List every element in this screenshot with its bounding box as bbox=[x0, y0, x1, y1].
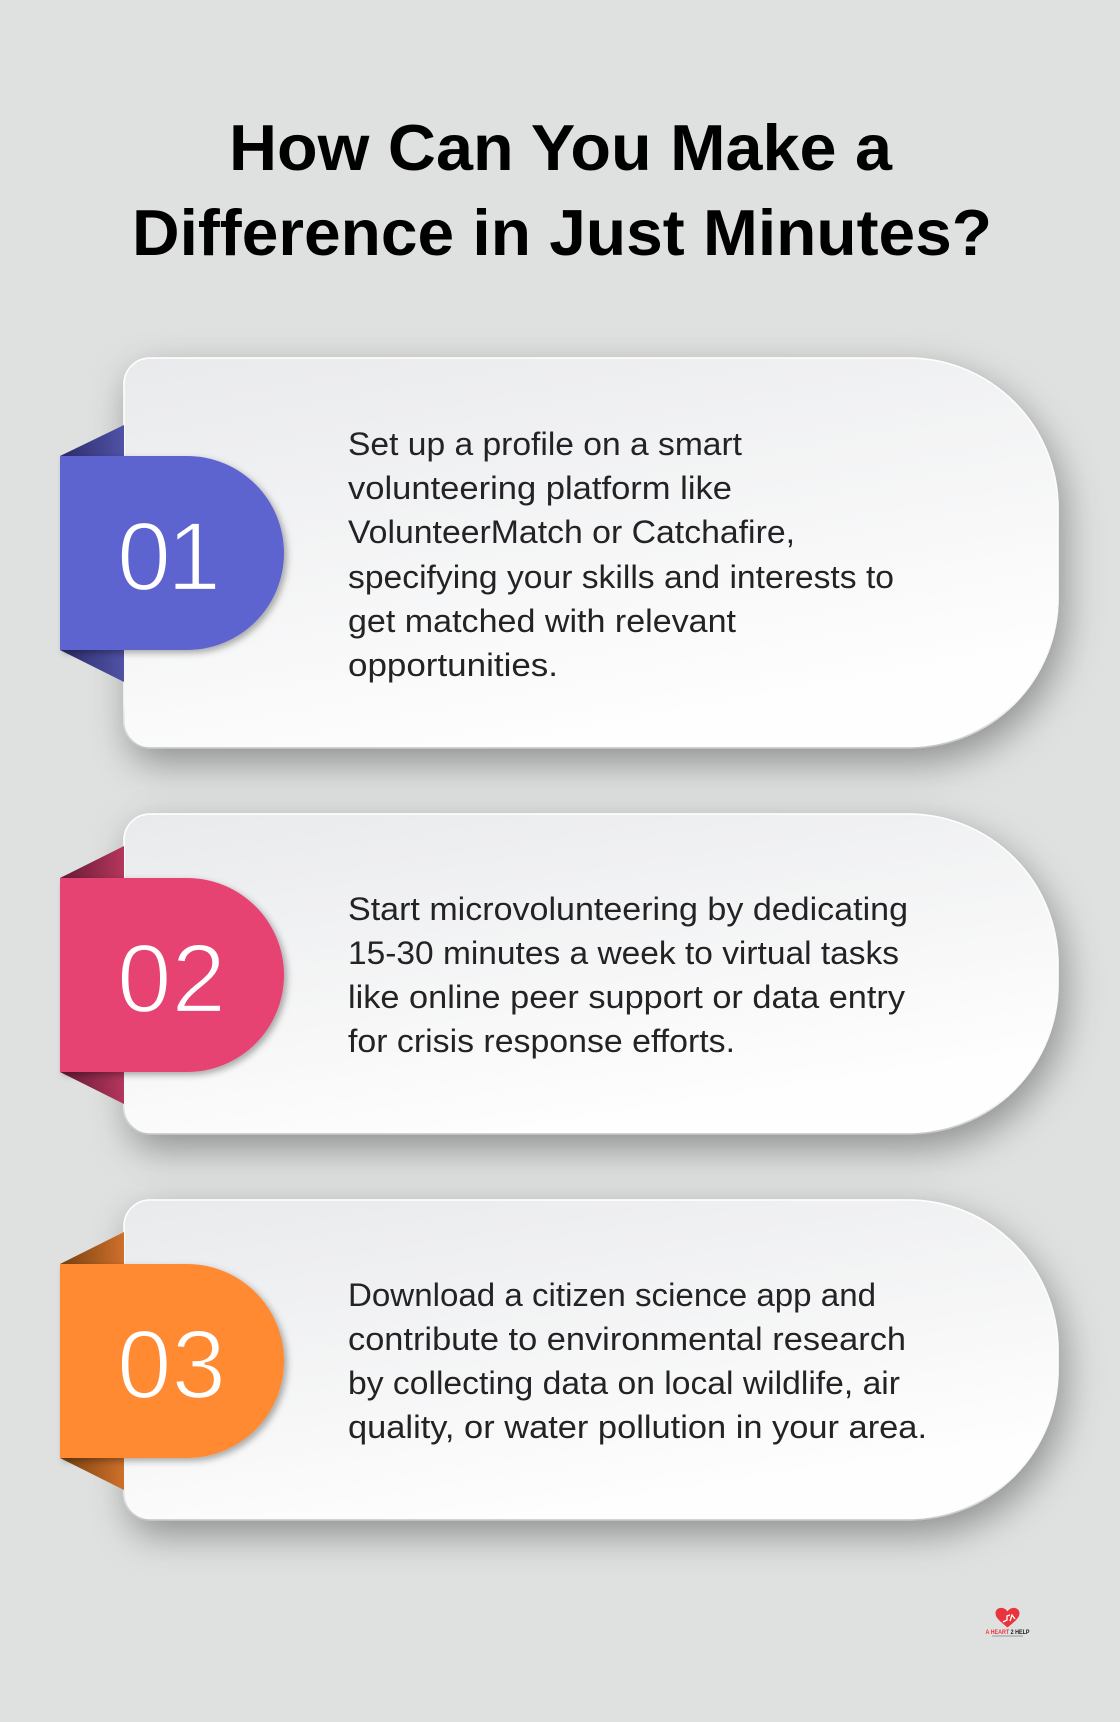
text: step 1: get matched with relevant bbox=[348, 603, 736, 639]
ribbon fold bottom 1 bbox=[60, 650, 124, 682]
text: step 1: opportunities. bbox=[348, 647, 558, 683]
ribbon fold bottom 2 bbox=[60, 1072, 124, 1104]
icon: hand bbox=[1003, 1615, 1015, 1622]
text: step 3: quality, or water pollution in your area. bbox=[348, 1409, 927, 1445]
logo wordmark: A HEART 2 HELP bbox=[986, 1630, 1030, 1636]
text: step 2 bbox=[348, 891, 908, 1059]
text: step 2: 15-30 minutes a week to virtual tasks bbox=[348, 935, 899, 971]
icon: heart bbox=[996, 1608, 1020, 1628]
ribbon fold bottom 3 bbox=[60, 1458, 124, 1490]
text: step 3: contribute to environmental research bbox=[348, 1321, 906, 1357]
text: step 1 bbox=[348, 426, 894, 683]
text: step 3: Download a citizen science app and bbox=[348, 1277, 876, 1313]
text: step 2: for crisis response efforts. bbox=[348, 1023, 735, 1059]
text: step 1: volunteering platform like bbox=[348, 470, 732, 506]
text: step 3 bbox=[348, 1277, 927, 1445]
card 3 background bbox=[124, 1200, 1058, 1520]
text: step 1: Set up a profile on a smart bbox=[348, 426, 742, 462]
ribbon fold top 3 bbox=[60, 1232, 124, 1264]
text: step 1: specifying your skills and interests to bbox=[348, 559, 894, 595]
title: Difference in Just Minutes? bbox=[132, 196, 992, 269]
number 02: 02 bbox=[117, 924, 226, 1033]
logo tagline bbox=[992, 1636, 1023, 1637]
text: step 1: VolunteerMatch or Catchafire, bbox=[348, 514, 795, 550]
panel: step 2 bbox=[60, 814, 1058, 1134]
number badge 2 bbox=[60, 878, 284, 1072]
card 1 background bbox=[124, 358, 1058, 748]
panel: step 1 bbox=[60, 358, 1058, 748]
ribbon fold top 1 bbox=[60, 425, 124, 456]
panel: step 3 bbox=[60, 1200, 1058, 1520]
number badge 3 bbox=[60, 1264, 284, 1458]
card 2 background bbox=[124, 814, 1058, 1134]
logo: A Heart 2 Help bbox=[986, 1608, 1030, 1636]
ribbon fold top 2 bbox=[60, 846, 124, 878]
number badge 1 bbox=[60, 456, 284, 650]
number 03: 03 bbox=[117, 1310, 226, 1419]
title: How Can You Make a bbox=[229, 111, 893, 184]
number 01: 01 bbox=[117, 502, 221, 611]
title bbox=[132, 111, 992, 269]
text: step 2: like online peer support or data entry bbox=[348, 979, 905, 1015]
text: step 2: Start microvolunteering by dedicating bbox=[348, 891, 908, 927]
text: step 3: by collecting data on local wildlife, air bbox=[348, 1365, 900, 1401]
